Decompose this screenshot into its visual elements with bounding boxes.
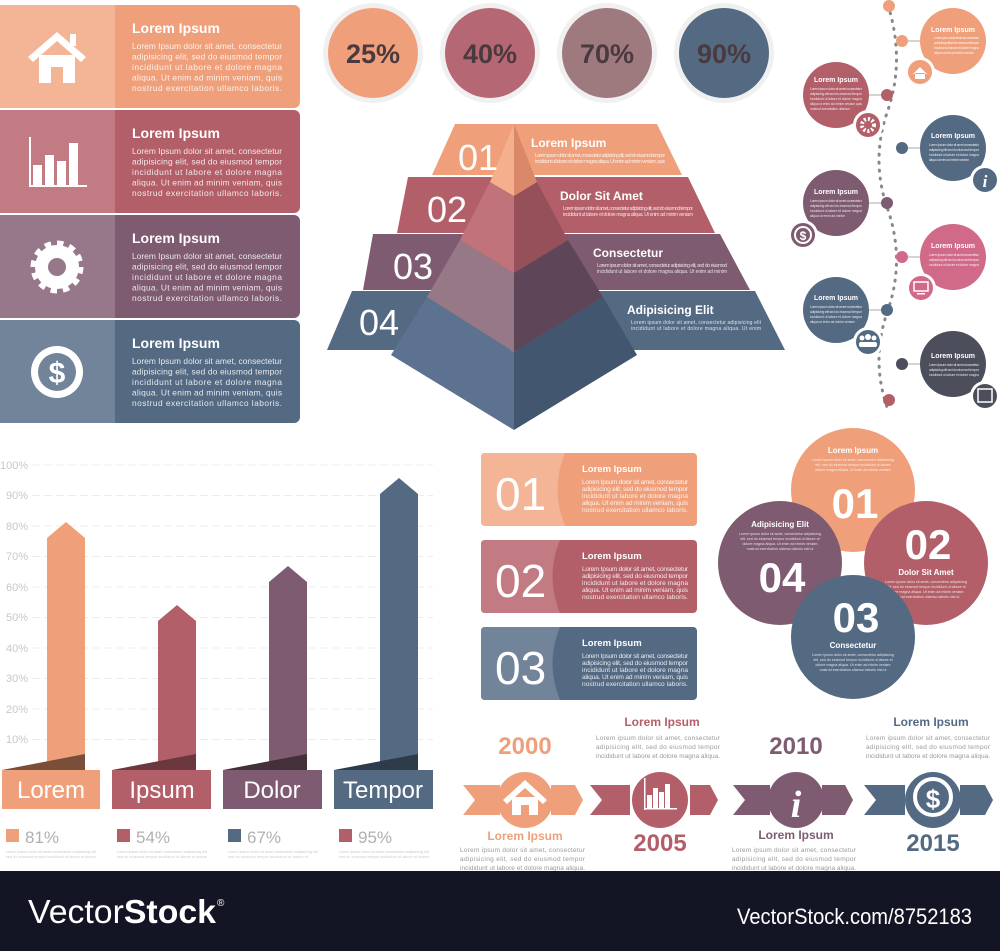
circle 40% bbox=[440, 3, 540, 103]
layer 1 bbox=[490, 124, 537, 196]
option 1: Lorem Ipsum bbox=[132, 20, 220, 36]
pyramid chart: Lorem Ipsum bbox=[531, 136, 606, 150]
option 4: incididunt ut labore et dolore magna bbox=[132, 377, 282, 387]
circle 01: Lorem Ipsum bbox=[828, 446, 878, 455]
bubble 4: Lorem Ipsum bbox=[814, 189, 858, 196]
box 03 bbox=[481, 627, 697, 700]
milestone 2015: incididunt ut labore et dolore magna aliqua. bbox=[866, 753, 990, 760]
option 2 bbox=[0, 110, 300, 213]
bar: Ipsum bbox=[112, 605, 211, 809]
circle 04 bbox=[718, 501, 842, 625]
circle 04: 04 bbox=[759, 554, 806, 601]
milestone 2000: Lorem ipsum dolor sit amet, consectetur bbox=[460, 847, 586, 854]
circle 25%: 25% bbox=[346, 39, 400, 69]
option 3: incididunt ut labore et dolore magna bbox=[132, 272, 282, 282]
panel: left option list bbox=[0, 5, 300, 423]
bubble 3: adipisicing elit sed do eiusmod tempor bbox=[929, 148, 980, 152]
option 4: nostrud exercitation ullamco laboris. bbox=[132, 398, 282, 408]
box 03: 03 bbox=[495, 642, 546, 694]
milestone 2010 bbox=[732, 733, 857, 872]
option 3: Lorem Ipsum bbox=[132, 230, 220, 246]
bubble 6: aliqua ut enim ad minim veniam bbox=[810, 320, 855, 324]
legend: sed do eiusmod tempor incididunt ut labore et dolore bbox=[6, 855, 96, 859]
bubble 5: Lorem Ipsum bbox=[931, 243, 975, 250]
bubble 2 bbox=[803, 62, 893, 140]
option 4: adipisicing elit, sed do eiusmod tempor bbox=[132, 366, 282, 376]
circle 01: Lorem ipsum dolor sit amet, consectetur adipisicing bbox=[812, 458, 894, 462]
pyramid chart: Lorem ipsum dolor sit amet, consectetur adipisicing elit, sed do eiusmod tempor bbox=[563, 206, 693, 212]
box 02: nostrud exercitation ullamco laboris. bbox=[582, 594, 688, 601]
circle 04: nostrud exercitation ullamco laboris nisi ut bbox=[747, 547, 813, 551]
legend: Lorem ipsum dolor sit amet consectetur adipisicing elit bbox=[6, 850, 96, 854]
bubble 3: incididunt ut labore et dolore magna bbox=[929, 153, 979, 157]
bubble 5: incididunt ut labore et dolore magna bbox=[929, 263, 979, 267]
box 01: Lorem Ipsum bbox=[582, 464, 642, 475]
circle 02: elit, sed do eiusmod tempor incididunt ut labore et bbox=[886, 585, 966, 589]
bubble 7: Lorem ipsum dolor sit amet consectetur bbox=[929, 363, 980, 367]
bubble 4: incididunt ut labore et dolore magna bbox=[810, 209, 862, 213]
y axis grid: 80% bbox=[6, 521, 28, 533]
legend: 54% bbox=[136, 828, 170, 847]
box 02: 02 bbox=[495, 555, 546, 607]
milestone 2000: Lorem Ipsum bbox=[487, 829, 563, 843]
bubble 3: aliqua ut enim ad minim veniam bbox=[929, 158, 969, 162]
bar: Lorem bbox=[2, 522, 100, 809]
circle 01: dolore magna aliqua. Ut enim ad minim veniam bbox=[815, 468, 891, 472]
option 1: adipisicing elit, sed do eiusmod tempor bbox=[132, 52, 282, 62]
layer 2 bbox=[460, 182, 568, 273]
pyramid chart: incididunt ut labore et dolore magna aliqua. Ut enim bbox=[631, 326, 761, 332]
box 03: adipisicing elit, sed do eiusmod tempor bbox=[582, 660, 689, 667]
bubble 3 bbox=[896, 115, 1000, 195]
bubble 1: aliqua ut enim ad minim veniam bbox=[934, 51, 974, 55]
bubble 1: Lorem ipsum dolor sit amet consectetur bbox=[934, 36, 980, 40]
legend: sed do eiusmod tempor incididunt ut labore et bbox=[228, 855, 308, 859]
circle 01 bbox=[791, 428, 915, 552]
circle 02 bbox=[864, 501, 988, 625]
option 2: adipisicing elit, sed do eiusmod tempor bbox=[132, 156, 282, 166]
year timeline bbox=[460, 715, 993, 872]
pyramid chart: 04 bbox=[359, 302, 399, 343]
bubble 4: aliqua ut enim ad minim bbox=[810, 214, 845, 218]
y axis grid: 30% bbox=[6, 673, 28, 685]
y axis grid: 50% bbox=[6, 612, 28, 624]
legend: Lorem ipsum dolor sit amet consectetur adipisicing elit bbox=[339, 850, 429, 854]
box 01 bbox=[481, 453, 697, 526]
circle 04: Adipisicing Elit bbox=[751, 520, 809, 529]
circle 70% bbox=[557, 3, 657, 103]
pyramid chart: 01 bbox=[458, 137, 498, 178]
numbered option boxes bbox=[481, 453, 697, 700]
box 01: incididunt ut labore et dolore magna bbox=[582, 493, 688, 500]
bubble 1: Lorem Ipsum bbox=[931, 27, 975, 34]
option 2: incididunt ut labore et dolore magna bbox=[132, 167, 282, 177]
bubble 5 bbox=[896, 224, 986, 303]
circle 03: Lorem ipsum dolor sit amet, consectetur adipisicing bbox=[812, 653, 894, 657]
pyramid chart: Adipisicing Elit bbox=[627, 303, 714, 317]
pyramid chart: 03 bbox=[393, 246, 433, 287]
bubble 1: incididunt ut labore et dolore magna bbox=[934, 46, 979, 50]
milestone 2000: 2000 bbox=[498, 733, 552, 760]
milestone 2010: adipisicing elit, sed do eiusmod tempor bbox=[732, 856, 857, 863]
bubble 5: Lorem ipsum dolor sit amet consectetur bbox=[929, 253, 980, 257]
bubble 6: incididunt ut labore et dolore magna bbox=[810, 315, 862, 319]
circle 02: Lorem ipsum dolor sit amet, consectetur adipisicing bbox=[885, 580, 967, 584]
milestone 2010: Lorem ipsum dolor sit amet, consectetur bbox=[732, 847, 857, 854]
circle 90%: 90% bbox=[697, 39, 751, 69]
bubble 7: incididunt ut labore et dolore magna bbox=[929, 373, 979, 377]
bubble 6: Lorem ipsum dolor sit amet consectetur bbox=[810, 305, 863, 309]
bubble 2: nostrud exercitation ullamco bbox=[810, 107, 850, 111]
circle 03 bbox=[791, 575, 915, 699]
pyramid chart: incididunt ut labore et dolore magna aliqua. Ut enim ad minim veniam bbox=[563, 212, 693, 218]
logo text: VectorStock bbox=[28, 893, 217, 930]
milestone 2015: 2015 bbox=[906, 830, 960, 857]
milestone 2010: 2010 bbox=[769, 733, 823, 760]
bubble 1 bbox=[883, 0, 986, 87]
layer 3 bbox=[427, 240, 603, 352]
bubble 3: Lorem ipsum dolor sit amet consectetur bbox=[929, 143, 980, 147]
bar: Dolor: Dolor bbox=[243, 777, 301, 804]
option 1: aliqua. Ut enim ad minim veniam, quis bbox=[132, 72, 282, 82]
option 3: Lorem Ipsum dolor sit amet, consectetur bbox=[132, 251, 282, 261]
pyramid chart: Lorem ipsum dolor sit amet, consectetur adipisicing elit bbox=[631, 320, 762, 326]
option 1: Lorem Ipsum dolor sit amet, consectetur bbox=[132, 41, 282, 51]
y axis grid: 20% bbox=[6, 704, 28, 716]
bar: Tempor: Tempor bbox=[343, 777, 423, 804]
circle 03: nostrud exercitation ullamco laboris nisi ut bbox=[820, 668, 886, 672]
circle 90% bbox=[674, 3, 774, 103]
icon: gear bbox=[35, 245, 79, 289]
milestone 2005: Lorem ipsum dolor sit amet, consectetur bbox=[596, 735, 721, 742]
option 2: nostrud exercitation ullamco laboris. bbox=[132, 188, 282, 198]
bar: Lorem: Lorem bbox=[17, 777, 85, 804]
bubble 4 bbox=[788, 170, 893, 250]
box 02: adipisicing elit, sed do eiusmod tempor bbox=[582, 573, 689, 580]
option 2: Lorem Ipsum dolor sit amet, consectetur bbox=[132, 146, 282, 156]
milestone 2010: i bbox=[791, 784, 802, 826]
image id: VectorStock.com/8752183 bbox=[737, 904, 972, 929]
circle 25% bbox=[323, 3, 423, 103]
box 02: incididunt ut labore et dolore magna bbox=[582, 580, 688, 587]
bubble 4: Lorem ipsum dolor sit amet consectetur bbox=[810, 199, 863, 203]
pyramid chart: 02 bbox=[427, 189, 467, 230]
box 02: aliqua. Ut enim ad minim veniam, quis bbox=[582, 587, 689, 594]
milestone 2015: $ bbox=[926, 784, 941, 814]
circle 02: dolore magna aliqua. Ut enim ad minim veniam bbox=[888, 590, 964, 594]
circle 01: 01 bbox=[832, 480, 878, 527]
bubble 2: aliqua ut enim ad minim veniam quis bbox=[810, 102, 862, 106]
option 1: incididunt ut labore et dolore magna bbox=[132, 62, 282, 72]
box 02 bbox=[481, 540, 697, 613]
legend: Lorem ipsum dolor sit amet consectetur adipisicing elit bbox=[228, 850, 318, 854]
icon: dollar coin: $ bbox=[49, 357, 66, 390]
icon: house bbox=[28, 32, 86, 83]
option 1: nostrud exercitation ullamco laboris. bbox=[132, 83, 282, 93]
bubble 2: Lorem Ipsum bbox=[814, 77, 858, 84]
bar: Ipsum: Ipsum bbox=[129, 777, 195, 804]
box 01: nostrud exercitation ullamco laboris. bbox=[582, 507, 688, 514]
bubble 3: i bbox=[983, 172, 988, 191]
milestone 2010: incididunt ut labore et dolore magna aliqua. bbox=[732, 865, 856, 872]
milestone 2010: Lorem Ipsum bbox=[758, 828, 834, 842]
box 02: Lorem Ipsum bbox=[582, 551, 642, 562]
pyramid chart: Lorem ipsum dolor sit amet, consectetur adipisicing elit, sed do eiusmod tempor bbox=[535, 153, 665, 159]
footer bar: ® bbox=[217, 898, 225, 909]
option 2: Lorem Ipsum bbox=[132, 125, 220, 141]
vertical timeline with bubbles bbox=[788, 0, 1000, 411]
bubble 1: adipisicing elit sed do eiusmod tempor bbox=[934, 41, 980, 45]
legend: 81% bbox=[25, 828, 59, 847]
circle 04: dolore magna aliqua. Ut enim ad minim veniam bbox=[742, 542, 818, 546]
box 01: aliqua. Ut enim ad minim veniam, quis bbox=[582, 500, 689, 507]
circle 03: Consectetur bbox=[830, 641, 876, 650]
circle 02: Dolor Sit Amet bbox=[898, 568, 954, 577]
option 4: Lorem Ipsum bbox=[132, 335, 220, 351]
milestone 2005: adipisicing elit, sed do eiusmod tempor bbox=[596, 744, 721, 751]
bar chart bbox=[0, 460, 433, 859]
legend: sed do eiusmod tempor incididunt ut labore et dolore bbox=[117, 855, 207, 859]
box 03: nostrud exercitation ullamco laboris. bbox=[582, 681, 688, 688]
circle 02: 02 bbox=[905, 521, 951, 568]
bubble 4: adipisicing elit sed do eiusmod tempor bbox=[810, 204, 863, 208]
bubble 2: incididunt ut labore et dolore magna bbox=[810, 97, 862, 101]
box 03: aliqua. Ut enim ad minim veniam, quis bbox=[582, 674, 689, 681]
box 01: adipisicing elit, sed do eiusmod tempor bbox=[582, 486, 689, 493]
footer bar bbox=[0, 871, 1000, 951]
legend: 67% bbox=[247, 828, 281, 847]
percent circles bbox=[323, 3, 774, 103]
option 4: Lorem Ipsum dolor sit amet, consectetur bbox=[132, 356, 282, 366]
bubble 3: Lorem Ipsum bbox=[931, 133, 975, 140]
option 2: aliqua. Ut enim ad minim veniam, quis bbox=[132, 178, 282, 188]
bubble 2: Lorem ipsum dolor sit amet consectetur bbox=[810, 87, 863, 91]
milestone 2005 bbox=[590, 715, 721, 857]
circle 02: nostrud exercitation ullamco laboris nisi ut bbox=[893, 595, 959, 599]
circle 04: Lorem ipsum dolor sit amet, consectetur adipisicing bbox=[739, 532, 821, 536]
option 4 bbox=[0, 320, 300, 423]
y axis grid: 60% bbox=[6, 582, 28, 594]
milestone 2015: Lorem ipsum dolor sit amet, consectetur bbox=[866, 735, 991, 742]
y axis grid: 100% bbox=[0, 460, 28, 472]
option 3: nostrud exercitation ullamco laboris. bbox=[132, 293, 282, 303]
milestone 2005: incididunt ut labore et dolore magna aliqua. bbox=[596, 753, 720, 760]
milestone 2000: incididunt ut labore et dolore magna aliqua. bbox=[460, 865, 585, 872]
option 1 bbox=[0, 5, 300, 108]
option 3: aliqua. Ut enim ad minim veniam, quis bbox=[132, 282, 282, 292]
box 03: Lorem Ipsum bbox=[582, 638, 642, 649]
circle 40%: 40% bbox=[463, 39, 517, 69]
milestone 2000 bbox=[460, 733, 586, 872]
circle 03: dolore magna aliqua. Ut enim ad minim veniam bbox=[815, 663, 891, 667]
bubble 6: Lorem Ipsum bbox=[814, 295, 858, 302]
milestone 2015: adipisicing elit, sed do eiusmod tempor bbox=[866, 744, 991, 751]
option 3 bbox=[0, 215, 300, 318]
icon: dollar coin bbox=[31, 346, 83, 398]
bubble 6 bbox=[803, 277, 893, 357]
pyramid chart: Consectetur bbox=[593, 246, 663, 260]
circle 03: 03 bbox=[833, 594, 879, 641]
milestone 2005: 2005 bbox=[633, 830, 687, 857]
circle 70%: 70% bbox=[580, 39, 634, 69]
milestone 2000: adipisicing elit, sed do eiusmod tempor bbox=[460, 856, 586, 863]
bubble 7: adipisicing elit sed do eiusmod tempor bbox=[929, 368, 980, 372]
y axis grid: 10% bbox=[6, 734, 28, 746]
box 01: 01 bbox=[495, 468, 546, 520]
y axis grid: 40% bbox=[6, 643, 28, 655]
milestone 2005: Lorem Ipsum bbox=[624, 715, 700, 729]
bubble 6: adipisicing elit sed do eiusmod tempor bbox=[810, 310, 863, 314]
option 4: aliqua. Ut enim ad minim veniam, quis bbox=[132, 388, 282, 398]
pyramid chart: incididunt ut labore et dolore magna aliqua. Ut enim ad minim bbox=[597, 269, 727, 275]
circle 03: elit, sed do eiusmod tempor incididunt ut labore et bbox=[813, 658, 893, 662]
pyramid chart: Lorem ipsum dolor sit amet, consectetur adipisicing elit, sed do eiusmod bbox=[597, 263, 727, 269]
bar: Dolor bbox=[223, 566, 322, 809]
circle 04: elit, sed do eiusmod tempor incididunt ut labore et bbox=[740, 537, 820, 541]
legend: Lorem ipsum dolor sit amet consectetur adipisicing elit bbox=[117, 850, 207, 854]
milestone 2015 bbox=[864, 715, 993, 857]
option 3: adipisicing elit, sed do eiusmod tempor bbox=[132, 262, 282, 272]
pyramid chart: incididunt ut labore et dolore magna aliqua. Ut enim ad minim veniam, quis bbox=[535, 159, 666, 165]
legend: sed do eiusmod tempor incididunt ut labore et dolore bbox=[339, 855, 429, 859]
y axis grid: 70% bbox=[6, 551, 28, 563]
bubble 7: Lorem Ipsum bbox=[931, 353, 975, 360]
milestone 2015: Lorem Ipsum bbox=[893, 715, 969, 729]
legend: 95% bbox=[358, 828, 392, 847]
pyramid chart bbox=[327, 124, 785, 430]
box 02: Lorem Ipsum dolor sit amet, consectetur bbox=[582, 566, 689, 573]
y axis grid: 90% bbox=[6, 490, 28, 502]
box 03: incididunt ut labore et dolore magna bbox=[582, 667, 688, 674]
icon: bar chart bbox=[29, 137, 87, 187]
layer 4 bbox=[391, 297, 637, 430]
pyramid chart: Dolor Sit Amet bbox=[560, 189, 643, 203]
bar: Tempor bbox=[334, 478, 433, 809]
bubble 5: adipisicing elit sed do eiusmod tempor bbox=[929, 258, 980, 262]
four-circle diagram bbox=[718, 428, 988, 699]
box 03: Lorem Ipsum dolor sit amet, consectetur bbox=[582, 653, 689, 660]
bubble 7 bbox=[883, 331, 1000, 411]
y axis grid bbox=[0, 460, 433, 746]
bubble 4: $ bbox=[800, 229, 807, 243]
legend bbox=[6, 828, 429, 859]
box 01: Lorem Ipsum dolor sit amet, consectetur bbox=[582, 479, 689, 486]
bubble 2: adipisicing elit sed do eiusmod tempor bbox=[810, 92, 863, 96]
circle 01: elit, sed do eiusmod tempor incididunt ut labore bbox=[815, 463, 891, 467]
